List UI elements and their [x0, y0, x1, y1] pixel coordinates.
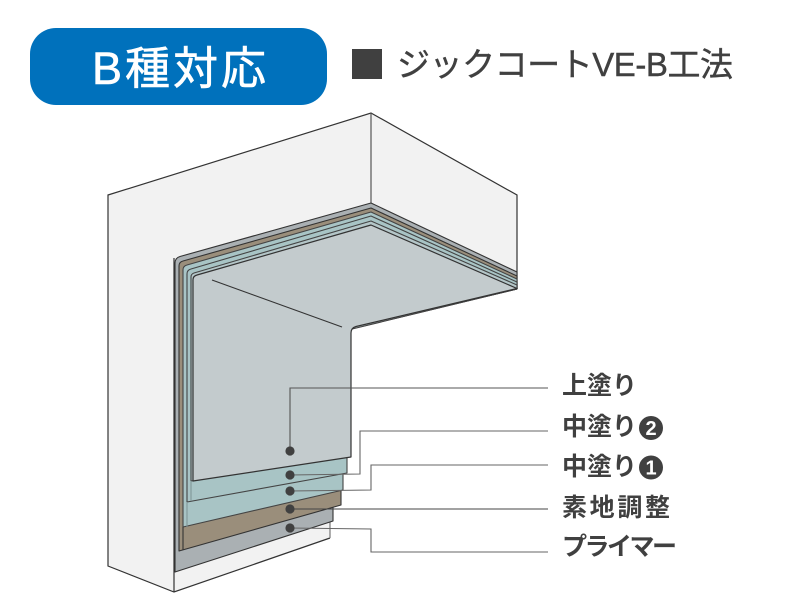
coating layers	[175, 203, 517, 572]
layer: primer	[175, 203, 517, 572]
label: プライマー: プライマー	[562, 527, 677, 563]
heading badge: B種対応	[30, 28, 327, 105]
leader line and dot: middle coat 1	[285, 465, 548, 496]
layer: base adjustment	[179, 208, 517, 551]
label: 中塗り1: 中塗り	[562, 447, 637, 483]
leader line and dot: base adjustment	[285, 504, 548, 514]
leader line and dot: primer	[285, 523, 548, 552]
label: 中塗り1: 1	[645, 458, 657, 480]
heading badge: B種対応: B種対応	[92, 43, 266, 94]
leader line and dot: top coat	[285, 388, 548, 456]
label: 中塗り2: 中塗り	[562, 407, 637, 443]
layer: middle coat 1	[183, 212, 517, 527]
method title: ジックコートVE-B工法: ジックコートVE-B工法	[397, 46, 733, 83]
label: 素地調整: 素地調整	[562, 488, 670, 524]
layer: middle coat 2	[187, 216, 517, 502]
layer: top coat	[193, 225, 517, 481]
label: 上塗り: 上塗り	[562, 366, 637, 402]
label: 中塗り2: 2	[645, 418, 657, 440]
leader line and dot: middle coat 2	[285, 431, 548, 480]
wall structure	[108, 113, 517, 592]
layer: band between coats	[191, 221, 517, 481]
